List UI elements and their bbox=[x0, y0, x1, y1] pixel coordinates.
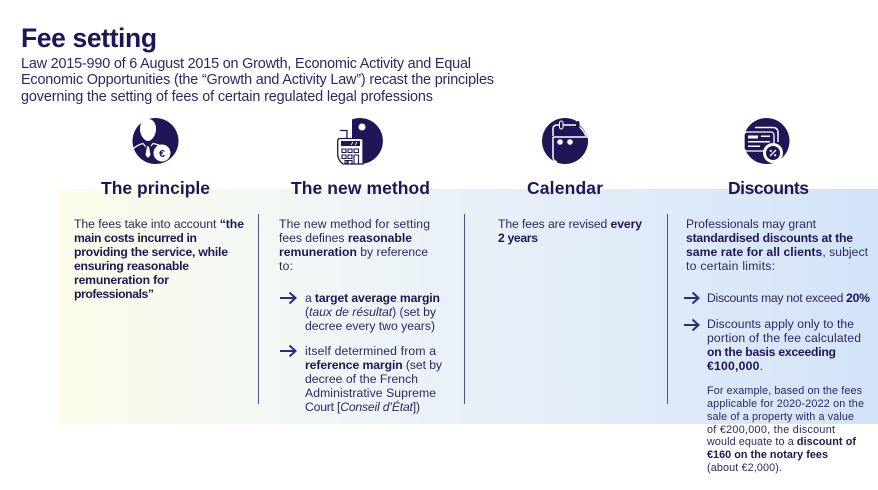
icon: card with percent badge bbox=[744, 118, 790, 164]
bullet 1: decree every two years) bbox=[305, 319, 435, 333]
bullet 2: on the basis exceeding bbox=[707, 345, 836, 359]
icon: person with euro coin: € bbox=[159, 148, 165, 160]
panel: the new method bbox=[279, 118, 443, 414]
text block: same rate for all clients, subject bbox=[686, 245, 869, 259]
text block: providing the service, while bbox=[74, 245, 228, 259]
icon: calendar bbox=[542, 118, 590, 164]
panel: the principle bbox=[74, 118, 244, 301]
example note bbox=[706, 385, 864, 474]
text block: main costs incurred in bbox=[74, 231, 197, 245]
intro paragraph: governing the setting of fees of certain regulated legal professions bbox=[21, 89, 433, 105]
text block: The new method for setting bbox=[279, 217, 430, 231]
example note: of €200,000, the discount bbox=[707, 424, 835, 436]
example note: For example, based on the fees bbox=[707, 385, 863, 397]
example note: sale of a property with a value bbox=[707, 411, 854, 423]
arrow 2 bbox=[280, 346, 296, 356]
text block: Professionals may grant bbox=[686, 217, 817, 231]
text block: The fees are revised every bbox=[498, 217, 642, 231]
bullet 2: portion of the fee calculated bbox=[707, 331, 861, 345]
bullet 2 bbox=[707, 317, 861, 373]
arrow 1 bbox=[684, 292, 698, 304]
divider 3 bbox=[667, 214, 668, 404]
bullet 1 bbox=[305, 291, 440, 333]
text block bbox=[498, 217, 642, 245]
heading: The new method bbox=[291, 178, 430, 198]
text block: professionals” bbox=[74, 287, 154, 301]
divider 2 bbox=[464, 214, 465, 404]
text block bbox=[279, 217, 430, 273]
intro paragraph bbox=[21, 56, 494, 105]
text block: remuneration by reference bbox=[279, 245, 428, 259]
heading: The principle bbox=[101, 178, 210, 198]
bullet 2 bbox=[305, 344, 443, 414]
divider 1 bbox=[258, 214, 259, 404]
panel: discounts bbox=[684, 118, 870, 474]
example note: applicable for 2020-2022 on the bbox=[707, 398, 864, 410]
text block: standardised discounts at the bbox=[686, 231, 853, 245]
heading: Calendar bbox=[527, 178, 603, 198]
text block: remuneration for bbox=[74, 273, 169, 287]
heading: Discounts bbox=[728, 178, 809, 198]
icon: person with euro coin bbox=[132, 118, 178, 164]
bullet 2: Administrative Supreme bbox=[305, 386, 436, 400]
text block: to: bbox=[279, 259, 293, 273]
bullet 1: Discounts may not exceed 20% bbox=[707, 291, 870, 305]
text block: The fees take into account “the bbox=[74, 217, 244, 231]
example note: €160 on the notary fees bbox=[707, 449, 828, 461]
text block: 2 years bbox=[498, 231, 538, 245]
text block: fees defines reasonable bbox=[279, 231, 412, 245]
text block bbox=[686, 217, 869, 273]
text block bbox=[74, 217, 244, 301]
bullet 2: Discounts apply only to the bbox=[707, 317, 854, 331]
icon: calculator over half circle bbox=[338, 118, 383, 164]
intro paragraph: Law 2015-990 of 6 August 2015 on Growth, Economic Activity and Equal bbox=[21, 56, 471, 72]
text block: to certain limits: bbox=[686, 259, 775, 273]
bullet 2: decree of the French bbox=[305, 372, 418, 386]
bullet 2: Court [Conseil d’État]) bbox=[305, 399, 420, 414]
arrow 1 bbox=[280, 292, 296, 304]
bullet 1: (taux de résultat) (set by bbox=[305, 305, 437, 319]
title: Fee setting bbox=[21, 23, 157, 53]
arrow 2 bbox=[684, 320, 698, 330]
intro paragraph: Economic Opportunities (the “Growth and Activity Law”) recast the principles bbox=[21, 72, 494, 88]
panel: calendar bbox=[498, 118, 642, 245]
example note: (about €2,000). bbox=[707, 462, 782, 474]
bullet 1: a target average margin bbox=[305, 291, 440, 305]
example note: would equate to a discount of bbox=[706, 436, 856, 448]
bullet 2: €100,000. bbox=[707, 359, 763, 373]
bullet 2: itself determined from a bbox=[305, 344, 436, 358]
text block: ensuring reasonable bbox=[74, 259, 189, 273]
bullet 2: reference margin (set by bbox=[305, 358, 443, 372]
background gradient panel bbox=[58, 189, 878, 424]
